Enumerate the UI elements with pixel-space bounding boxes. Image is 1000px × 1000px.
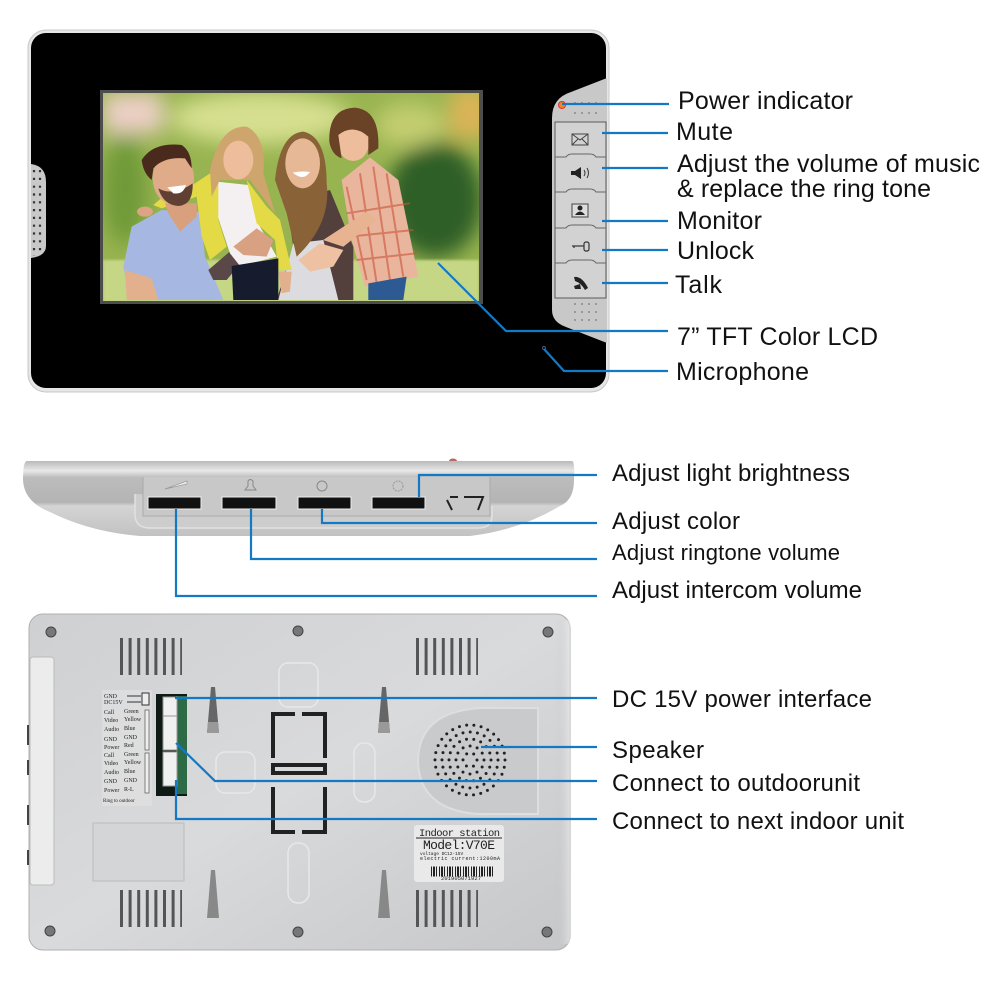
wiring legend: R-L xyxy=(124,787,134,793)
left speaker grille xyxy=(31,164,46,258)
wiring legend: Call xyxy=(104,710,114,716)
color slider slot xyxy=(298,497,351,509)
father shoulder hand xyxy=(137,207,153,217)
microphone hole xyxy=(542,346,546,350)
label: power interface: DC 15V power interface xyxy=(612,686,872,713)
wiring legend: Video xyxy=(104,761,118,767)
mounting slots xyxy=(207,687,390,918)
label: next indoor unit: Connect to next indoor unit xyxy=(612,808,904,835)
label: adjust volume and ring tone: Adjust the volume of music xyxy=(677,150,980,178)
volume slider slot xyxy=(148,497,201,509)
left side buttons xyxy=(27,725,29,865)
wiring legend: GND xyxy=(124,778,138,784)
rear view of monitor xyxy=(28,614,570,950)
vents xyxy=(120,656,478,908)
photo family figures xyxy=(123,108,418,300)
icon: key xyxy=(572,242,589,251)
label: brightness: Adjust light brightness xyxy=(612,460,850,487)
power indicator light xyxy=(558,102,566,108)
screws xyxy=(45,626,553,937)
icon: brightness xyxy=(393,481,403,491)
boy face xyxy=(338,130,368,161)
photo lawn xyxy=(103,260,479,302)
label: unlock: Unlock xyxy=(677,237,754,265)
wiring legend: Blue xyxy=(124,769,136,775)
wiring legend: Green xyxy=(124,709,139,715)
label: monitor: Monitor xyxy=(677,207,762,235)
front view of indoor monitor xyxy=(28,30,609,392)
speaker housing xyxy=(418,708,538,814)
label: talk: Talk xyxy=(675,271,722,299)
button panel xyxy=(555,122,606,298)
circuit board with connectors xyxy=(156,694,187,796)
wiring legend: DC15V xyxy=(104,700,123,706)
speaker holes xyxy=(435,725,505,795)
model label: Model:V70E xyxy=(423,838,495,853)
photo background foliage xyxy=(103,88,490,258)
wiring legend: Blue xyxy=(124,726,136,732)
boy hair xyxy=(329,108,378,158)
model label: 201905071927 xyxy=(441,875,481,882)
leader lines xyxy=(175,104,669,819)
label: microphone: Microphone xyxy=(676,358,809,386)
father neck xyxy=(165,203,197,232)
monitor black face xyxy=(31,33,606,388)
black centre frame xyxy=(273,714,325,832)
control panel bottom speaker holes xyxy=(574,304,600,320)
label: speaker: Speaker xyxy=(612,737,704,764)
side body xyxy=(23,461,574,536)
knockout shapes xyxy=(216,663,375,903)
monitor silver bezel xyxy=(28,30,609,392)
wiring legend: Red xyxy=(124,743,134,749)
label: adjust volume and ring tone: & replace the ring tone xyxy=(677,175,931,203)
wiring legend: Audio xyxy=(104,727,119,733)
control panel top speaker holes xyxy=(574,103,600,113)
wiring legend: Yellow xyxy=(124,760,142,766)
ringtone slider slot xyxy=(222,497,276,509)
icon: color xyxy=(317,481,327,491)
icon: speaker volume xyxy=(571,167,588,179)
girl hair xyxy=(210,127,275,213)
mother hair xyxy=(275,132,327,257)
girl face xyxy=(223,141,253,179)
icon: monitor person xyxy=(572,204,588,217)
wiring legend: GND xyxy=(124,735,138,741)
boy arm xyxy=(323,212,377,247)
boy shirt xyxy=(342,157,418,287)
screen family photo xyxy=(103,88,490,302)
control panel silver housing xyxy=(552,78,607,343)
label: ringtone volume: Adjust ringtone volume xyxy=(612,540,840,565)
model label: electric current:1200mA xyxy=(420,856,500,862)
rear right edge highlight xyxy=(555,620,570,944)
brightness slider slot xyxy=(372,497,425,509)
label: LCD: 7” TFT Color LCD xyxy=(677,323,878,351)
wiring legend: Call xyxy=(104,753,114,759)
top indicator bump xyxy=(449,458,457,464)
wiring legend: Yellow xyxy=(124,717,142,723)
girl jacket xyxy=(153,173,292,270)
father head xyxy=(152,158,194,204)
label: outdoor unit: Connect to outdoorunit xyxy=(612,770,860,797)
model label: Indoor station xyxy=(419,828,500,840)
father arm xyxy=(125,270,158,300)
connector port xyxy=(447,497,483,510)
girl shirt xyxy=(217,182,277,266)
girl jeans xyxy=(232,258,278,300)
hands xyxy=(233,228,273,257)
screen frame xyxy=(100,90,483,304)
label: color: Adjust color xyxy=(612,508,740,535)
icon: volume wedge xyxy=(165,481,187,489)
wiring legend: GND xyxy=(104,737,118,743)
boy jeans xyxy=(368,277,407,300)
icon: bell xyxy=(245,480,256,490)
wiring legend: Power xyxy=(104,788,119,794)
father beard xyxy=(158,183,193,206)
side view of monitor xyxy=(23,458,574,536)
wiring legend: Video xyxy=(104,718,118,724)
rear housing xyxy=(29,614,570,950)
icon: envelope xyxy=(572,134,588,145)
wiring legend: Audio xyxy=(104,770,119,776)
icon: handset xyxy=(574,277,588,290)
model label: voltage DC12-15V xyxy=(420,851,464,857)
wiring legend xyxy=(102,690,152,806)
label: power indicator: Power indicator xyxy=(678,87,853,115)
wiring legend: GND xyxy=(104,779,118,785)
father shirt xyxy=(123,210,223,300)
model label xyxy=(414,825,504,882)
label: mute: Mute xyxy=(676,118,733,146)
wiring legend: Power xyxy=(104,745,119,751)
father hair xyxy=(142,144,192,180)
control recess xyxy=(143,477,490,516)
left grip xyxy=(30,657,54,885)
label: intercom volume: Adjust intercom volume xyxy=(612,577,862,604)
label: adjust volume and ring tone xyxy=(677,150,980,203)
mother body xyxy=(277,190,353,300)
wiring legend: Ring to outdoor xyxy=(103,799,135,804)
wiring legend: GND xyxy=(104,694,118,700)
blank sticker area xyxy=(93,823,184,881)
mother face xyxy=(285,138,320,188)
wiring legend: Green xyxy=(124,752,139,758)
